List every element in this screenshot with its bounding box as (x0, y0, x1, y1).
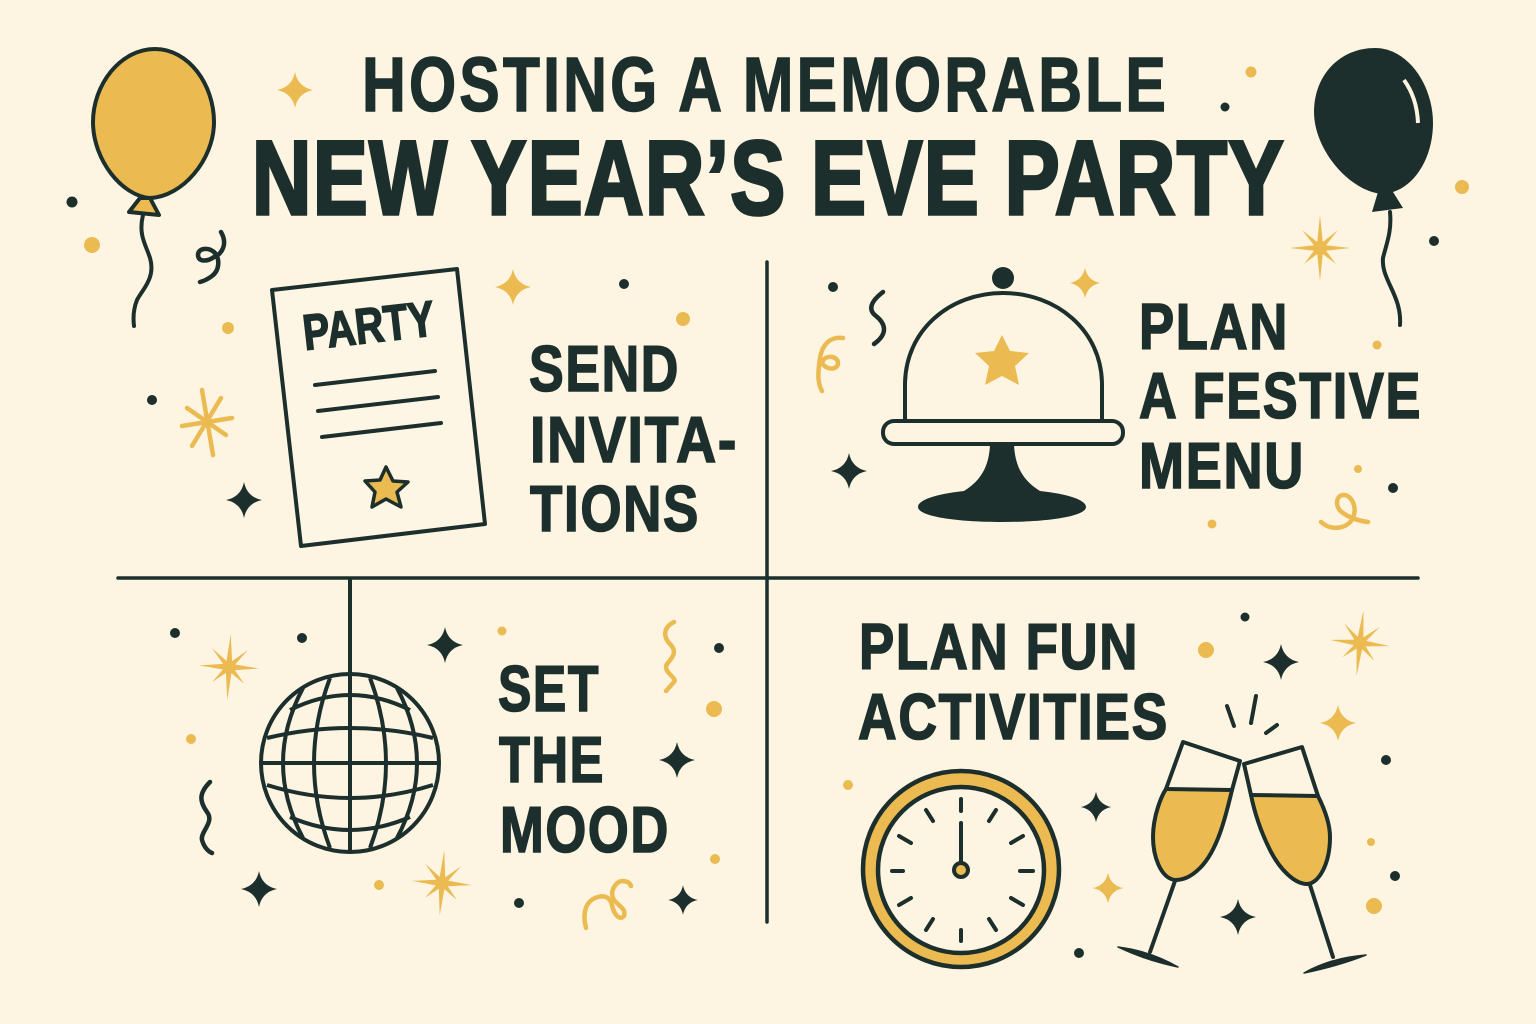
heading: set the mood: MOOD (500, 793, 670, 866)
heading: plan a festive menu: A FESTIVE (1139, 359, 1422, 432)
icon: disco ball (261, 579, 439, 852)
icon: cloche on cake stand (883, 267, 1123, 522)
icon: party invitation (272, 269, 485, 546)
icon: party invitation: PARTY (300, 290, 437, 361)
panel: send invitations (272, 269, 738, 546)
decoration: gold starbursts (182, 215, 1393, 918)
panel: plan fun activities (858, 610, 1366, 973)
panel: plan a festive menu (883, 267, 1422, 522)
heading: send invitations: INVITA- (530, 403, 738, 476)
heading: plan a festive menu (1139, 290, 1422, 502)
decoration: gold dots (84, 66, 1469, 914)
decoration: gold sparkles (277, 72, 1356, 903)
decoration: dark dots (66, 102, 1439, 958)
icon: champagne flutes (1118, 696, 1366, 973)
heading: send invitations: TIONS (530, 472, 700, 545)
heading: plan fun activities (858, 610, 1169, 753)
panel: set the mood (261, 579, 670, 866)
heading: set the mood (498, 652, 670, 866)
heading: send invitations (529, 332, 738, 545)
heading: set the mood: THE (499, 723, 605, 796)
title: NEW YEAR’S EVE PARTY (252, 120, 1285, 237)
decoration: confetti squiggles (198, 232, 1368, 928)
heading: plan a festive menu: MENU (1139, 429, 1305, 502)
heading: set the mood: SET (498, 652, 600, 725)
heading: send invitations: SEND (529, 332, 680, 405)
quadrant dividers (118, 262, 1418, 922)
heading: plan fun activities: ACTIVITIES (858, 680, 1169, 753)
icon: clock (863, 771, 1059, 967)
icon: dark balloon (1314, 48, 1433, 325)
title (252, 42, 1285, 237)
decoration: dark sparkles (226, 453, 1299, 935)
heading: plan a festive menu: PLAN (1139, 290, 1289, 363)
heading: plan fun activities: PLAN FUN (859, 610, 1139, 683)
icon: gold balloon (93, 49, 214, 326)
title: HOSTING A MEMORABLE (362, 42, 1169, 128)
